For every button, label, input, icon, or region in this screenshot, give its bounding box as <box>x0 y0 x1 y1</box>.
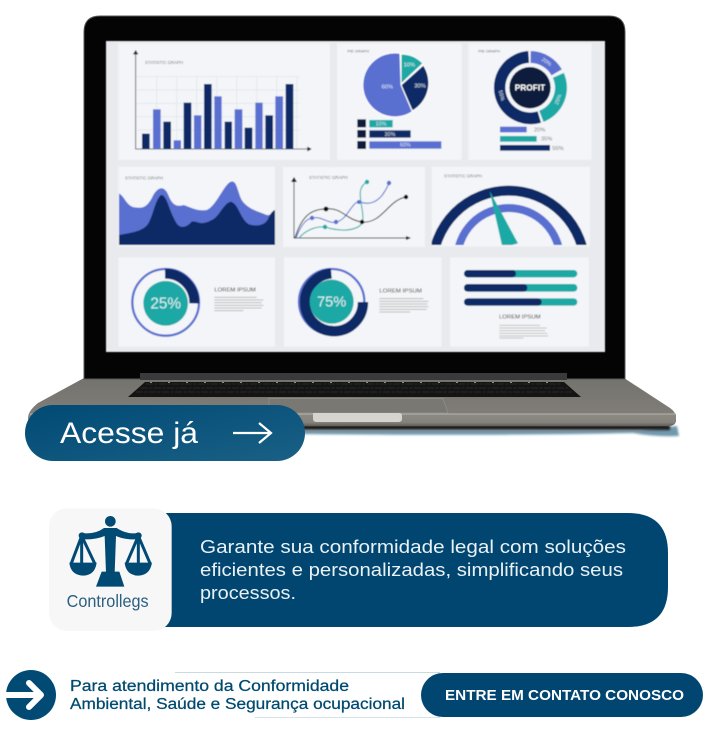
logo: Controllegs <box>49 508 172 631</box>
ring labels: 20% <box>540 57 553 68</box>
laptop base <box>28 378 676 426</box>
pie labels: 10% <box>404 63 415 69</box>
contact text: Para atendimento da Conformidade <box>70 678 349 695</box>
laptop lid <box>84 16 625 379</box>
button label: ENTRE EM CONTATO CONOSCO <box>445 688 684 704</box>
ring labels: 55% <box>497 90 505 102</box>
25% label: 25% <box>150 296 181 313</box>
panel: pie chart <box>337 43 462 160</box>
description text: eficientes e personalizadas, simplificando seus <box>200 559 623 580</box>
area title: STATISTIC GRAPH <box>125 175 163 180</box>
screen <box>106 41 605 352</box>
pie legend: 60% <box>400 143 411 149</box>
profit bars: 55% <box>552 146 564 152</box>
panel: profit donut <box>468 43 592 160</box>
bars <box>142 84 293 149</box>
pie legend: 30% <box>385 132 396 138</box>
panel: area chart <box>118 167 275 247</box>
profit title: PIE GRAPH <box>478 49 500 54</box>
description text: Garante sua conformidade legal com soluções <box>200 536 626 557</box>
heading: LOREM IPSUM <box>214 288 256 294</box>
icon: circle arrow <box>6 670 56 720</box>
pie labels <box>382 63 426 90</box>
profit bars: 20% <box>534 127 545 133</box>
button label: Acesse já <box>60 417 198 450</box>
dark area <box>119 195 275 245</box>
light area <box>119 182 275 245</box>
panel: gauge <box>431 167 590 246</box>
laptop shadow <box>60 425 679 436</box>
laptop <box>28 16 679 436</box>
icon: arrow <box>233 423 271 443</box>
logo name: Controllegs <box>67 591 149 611</box>
contact text <box>70 678 405 713</box>
trackpad <box>269 398 448 413</box>
panel: description card <box>150 513 668 627</box>
description text <box>200 536 626 603</box>
pie labels: 30% <box>414 84 426 90</box>
pie legend: 10% <box>376 122 387 128</box>
gauge arcs <box>430 185 588 246</box>
panel: line chart <box>283 167 425 247</box>
chart title: STATISTIC GRAPH <box>309 175 348 180</box>
profit bars: 35% <box>541 137 552 143</box>
panel: bar chart <box>118 43 330 160</box>
lines <box>295 197 406 238</box>
pie labels: 60% <box>382 84 393 90</box>
laptop front edge <box>29 414 676 426</box>
pie legend <box>357 119 441 149</box>
chart title: STATISTIC GRAPH <box>145 60 183 65</box>
heading: LOREM IPSUM <box>379 289 422 295</box>
pie title: PIE GRAPH <box>347 49 369 54</box>
hinge <box>140 373 567 380</box>
ring labels: 25% <box>554 93 563 106</box>
ring labels <box>497 57 563 106</box>
heading: LOREM IPSUM <box>499 314 541 320</box>
button: Acesse já <box>25 405 305 461</box>
pie slices <box>401 65 429 111</box>
keyboard <box>128 382 581 397</box>
latch <box>313 413 402 422</box>
profit bars <box>500 127 564 152</box>
icon: scales of justice <box>69 516 152 587</box>
description text: processos. <box>200 582 296 603</box>
gauge title: STATISTIC GRAPH <box>444 173 482 178</box>
profit label: PROFIT <box>515 82 545 92</box>
donut ring <box>500 57 539 118</box>
contact text: Ambiental, Saúde e Segurança ocupacional <box>70 696 405 713</box>
75% label: 75% <box>317 295 346 311</box>
dots <box>310 180 408 229</box>
panel: progress bars <box>450 257 589 347</box>
panel: 25% donut <box>118 257 275 347</box>
panel: 75% donut <box>284 257 442 347</box>
button: contact <box>421 673 703 717</box>
